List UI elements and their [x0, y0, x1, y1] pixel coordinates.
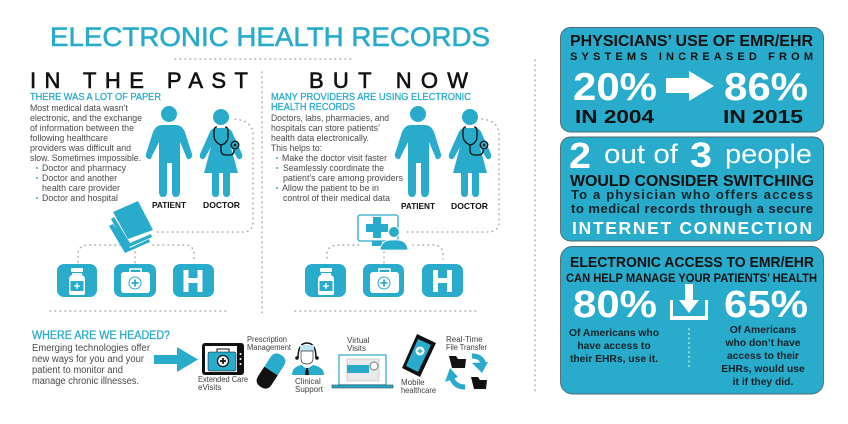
label: extended care — [198, 375, 249, 392]
icon: pill — [254, 351, 288, 391]
label: mobile healthcare: healthcare — [401, 386, 437, 395]
label: virtual visits: Visits — [347, 344, 366, 353]
icon: patient — [395, 106, 441, 197]
text block: now description: Seamlessly coordinate the — [283, 163, 384, 173]
text block: emerging technologies: manage chronic illnesses. — [32, 376, 139, 387]
text block: past description: health care provider — [42, 183, 120, 193]
icon: clinical support — [292, 343, 324, 375]
subheading: providers — [271, 91, 471, 113]
label: clinical support: Clinical — [295, 377, 321, 386]
label: virtual visits: Virtual — [347, 336, 370, 345]
icon: computer with provider — [358, 215, 408, 250]
panel: electronic access — [560, 246, 824, 394]
icon: paper stack — [109, 201, 153, 253]
subheading: paper: THERE WAS A LOT OF PAPER — [30, 91, 161, 103]
panel: 2 out of 3 — [560, 135, 824, 241]
text block: 65% description — [721, 325, 805, 388]
icon: mobile phone — [402, 334, 436, 377]
label: real-time file transfer — [446, 335, 487, 352]
connector lines — [327, 119, 499, 264]
label: clinical support: Support — [295, 385, 324, 394]
text block: now description: control of their medical data — [283, 193, 391, 203]
text block: secure access: To a physician who offers access — [571, 187, 813, 202]
icon: extended care tablet — [202, 343, 244, 375]
icon: doctor — [449, 109, 491, 197]
label: real-time file transfer: Real-Time — [446, 335, 483, 344]
arrow — [666, 71, 714, 101]
text block: emerging technologies: new ways for you and your — [32, 354, 145, 365]
subheading: systems increased: SYSTEMS INCREASED FROM — [570, 51, 813, 63]
subheading: providers: HEALTH RECORDS — [271, 101, 355, 113]
icon: file transfer — [445, 356, 488, 389]
icon: medical kit tile — [363, 264, 404, 297]
stat: 2 out of 3 people: 3 — [690, 136, 712, 175]
label: prescription management: Management — [247, 343, 292, 352]
label: doctor: DOCTOR — [203, 200, 240, 210]
label: extended care: eVisits — [198, 383, 221, 392]
stat: 20%: 20% — [573, 66, 657, 109]
stat: 80%: 80% — [573, 284, 657, 326]
text block: now description: Make the doctor visit faster — [282, 153, 387, 163]
panel: but now — [271, 68, 499, 297]
stat: 2 out of 3 people: out of — [604, 139, 679, 169]
stat: 2 out of 3 people: 2 — [569, 135, 591, 176]
text block: now description: health data electronically. — [271, 133, 369, 143]
text block: 80% description: their EHRs, use it. — [570, 354, 658, 365]
text block: 65% description: access to their — [727, 351, 799, 362]
panel: where are we headed — [32, 330, 488, 395]
text block: now description: This helps to: — [271, 143, 322, 153]
label: prescription management — [247, 335, 292, 352]
heading: electronic access: ELECTRONIC ACCESS TO EMR/EHR — [570, 255, 815, 271]
icon: medical kit tile — [114, 264, 156, 297]
text block: past description: slow. Sometimes impossible. — [30, 153, 141, 163]
text block: 65% description: who don’t have — [725, 338, 801, 349]
panel: in the past — [30, 68, 253, 297]
text block: past description: electronic, and the exchange — [30, 113, 142, 123]
text block: now description: Allow the patient to be in — [282, 183, 379, 193]
label: extended care: Extended Care — [198, 375, 249, 384]
text block: now description: hospitals can store patients’ — [271, 123, 380, 133]
icon: hospital tile — [422, 264, 463, 297]
text block: secure access: to medical records through a secure — [571, 201, 813, 216]
heading: physicians' use: PHYSICIANS’ USE OF EMR/EHR — [570, 33, 813, 50]
stat: 65%: 65% — [724, 284, 808, 326]
text block: emerging technologies: patient to monitor and — [32, 365, 123, 376]
icon: download — [670, 284, 708, 320]
text block: now description: patient’s care among providers — [283, 173, 403, 183]
text block: 80% description: have access to — [577, 341, 651, 352]
text block: past description: Doctor and another — [42, 173, 117, 183]
text block: emerging technologies: Emerging technologies offer — [32, 343, 151, 354]
text block: past description: Doctor and hospital — [42, 193, 118, 203]
text block: past description: of information between the — [30, 123, 134, 133]
title: ELECTRONIC HEALTH RECORDS — [50, 22, 490, 52]
text block: 65% description: Of Americans — [730, 325, 797, 336]
label: virtual visits — [347, 336, 370, 353]
label: prescription management: Prescription — [247, 335, 287, 344]
arrow — [154, 347, 198, 372]
stat: 86%: 86% — [724, 66, 808, 109]
subheading: providers: MANY PROVIDERS ARE USING ELECTRONIC — [271, 91, 471, 103]
icon: laptop — [332, 355, 393, 388]
text block: secure access — [571, 187, 813, 216]
heading: would consider switching: WOULD CONSIDER SWITCHING — [570, 173, 814, 190]
heading: internet connection: INTERNET CONNECTION — [572, 218, 812, 238]
panel: physicians' use — [560, 28, 824, 132]
text block: 80% description — [569, 328, 659, 365]
icon: hospital tile — [173, 264, 214, 297]
label: in 2004: IN 2004 — [575, 107, 654, 127]
label: patient: PATIENT — [401, 201, 436, 211]
text block: emerging technologies — [32, 343, 151, 387]
heading: but now: BUT NOW — [309, 68, 468, 93]
icon: doctor — [200, 109, 242, 197]
heading: where are we headed: WHERE ARE WE HEADED? — [32, 330, 170, 342]
text block: now description: Doctors, labs, pharmacies, and — [271, 113, 389, 123]
text block: 65% description: it if they did. — [733, 377, 793, 388]
stat: 2 out of 3 people: people — [725, 139, 812, 169]
label: doctor: DOCTOR — [451, 201, 488, 211]
text block: past description: providers was difficult and — [30, 143, 131, 153]
text block: now description — [271, 113, 403, 203]
label: mobile healthcare — [401, 378, 437, 395]
text block: past description: following healthcare — [30, 133, 108, 143]
heading: in the past: IN THE PAST — [30, 68, 248, 93]
text block: past description — [30, 103, 142, 203]
text block: 80% description: Of Americans who — [569, 328, 659, 339]
dotted dividers — [50, 59, 535, 395]
connector lines — [78, 119, 253, 263]
icon: patient — [146, 106, 192, 197]
label: mobile healthcare: Mobile — [401, 378, 425, 387]
stat: 2 out of 3 people — [569, 135, 812, 176]
label: patient: PATIENT — [152, 200, 187, 210]
subheading: manage health: CAN HELP MANAGE YOUR PATIENTS’ HEALTH — [566, 271, 817, 285]
label: real-time file transfer: File Transfer — [446, 343, 487, 352]
text block: past description: Doctor and pharmacy — [42, 163, 126, 173]
label: in 2015: IN 2015 — [723, 107, 803, 127]
label: clinical support — [295, 377, 324, 394]
icon: pharmacy tile — [305, 264, 346, 297]
icon: pharmacy tile — [57, 264, 97, 297]
text block: 65% description: EHRs, would use — [721, 364, 805, 375]
divider — [688, 329, 690, 370]
text block: past description: Most medical data wasn’t — [30, 103, 128, 113]
